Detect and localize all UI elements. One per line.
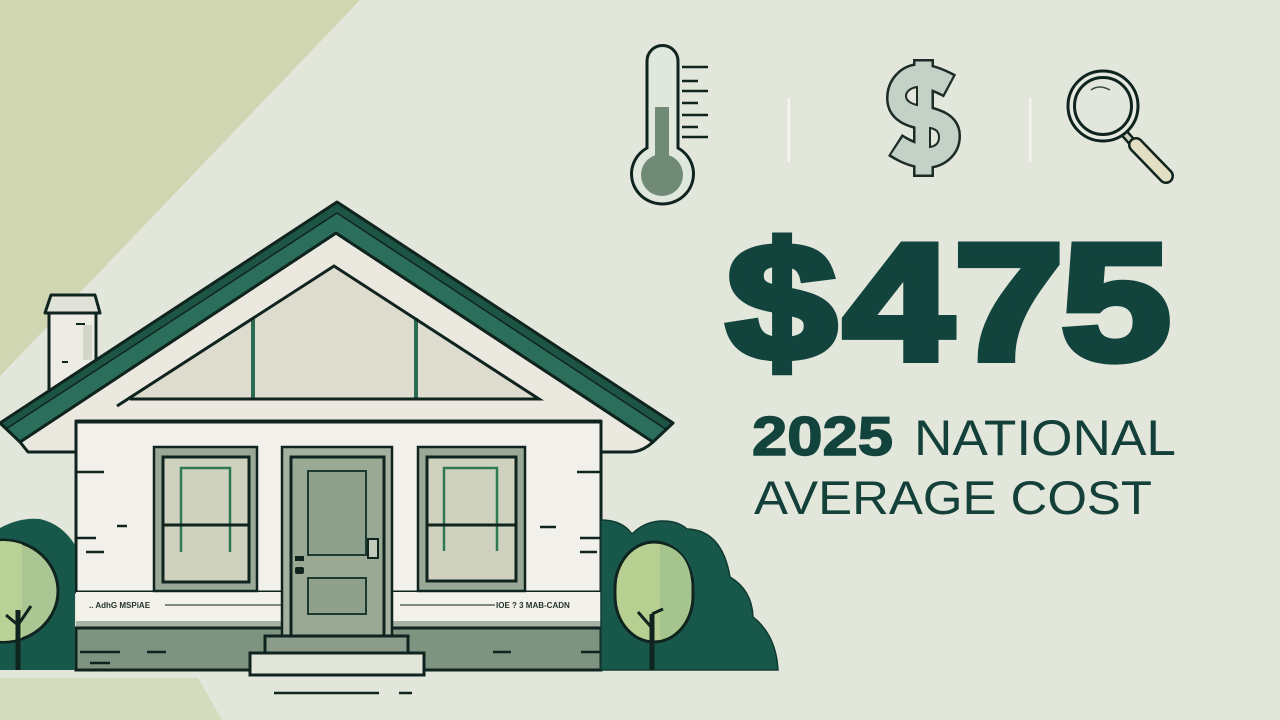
icon: magnifying glass: [1068, 71, 1166, 176]
wall trim band: .. AdhG MSPiAE: [89, 601, 151, 610]
left bush and tree: [0, 519, 75, 670]
gable and eaves: [20, 233, 653, 452]
subtitle: [752, 405, 1176, 524]
background: olive corner bottom-left: [0, 678, 222, 720]
divider 1: [788, 98, 790, 162]
left window: [154, 447, 257, 591]
wall trim band: [76, 592, 601, 628]
subtitle line 1 year: 2025: [752, 405, 893, 467]
subtitle line 1 word: NATIONAL: [914, 410, 1176, 466]
gable inner triangle: [117, 266, 539, 406]
house: [0, 202, 673, 693]
chimney: [45, 295, 100, 398]
icon: thermometer: [632, 45, 708, 204]
icon: dollar sign: [895, 59, 950, 177]
roof: [0, 202, 673, 442]
right window: [418, 447, 525, 591]
right bush and tree: [601, 520, 778, 670]
headline: price: $475: [727, 211, 1171, 394]
divider 2: [1029, 98, 1032, 162]
background: olive corner top-left: [0, 0, 360, 376]
ground lines: [274, 692, 412, 694]
steps: [250, 636, 424, 675]
wall trim band: IOE ? 3 MAB-CADN: [496, 601, 570, 610]
door: [282, 447, 392, 637]
foundation: [76, 628, 601, 670]
subtitle line 2: AVERAGE COST: [754, 471, 1152, 524]
wall: [76, 422, 601, 592]
wall marks: [77, 472, 600, 663]
